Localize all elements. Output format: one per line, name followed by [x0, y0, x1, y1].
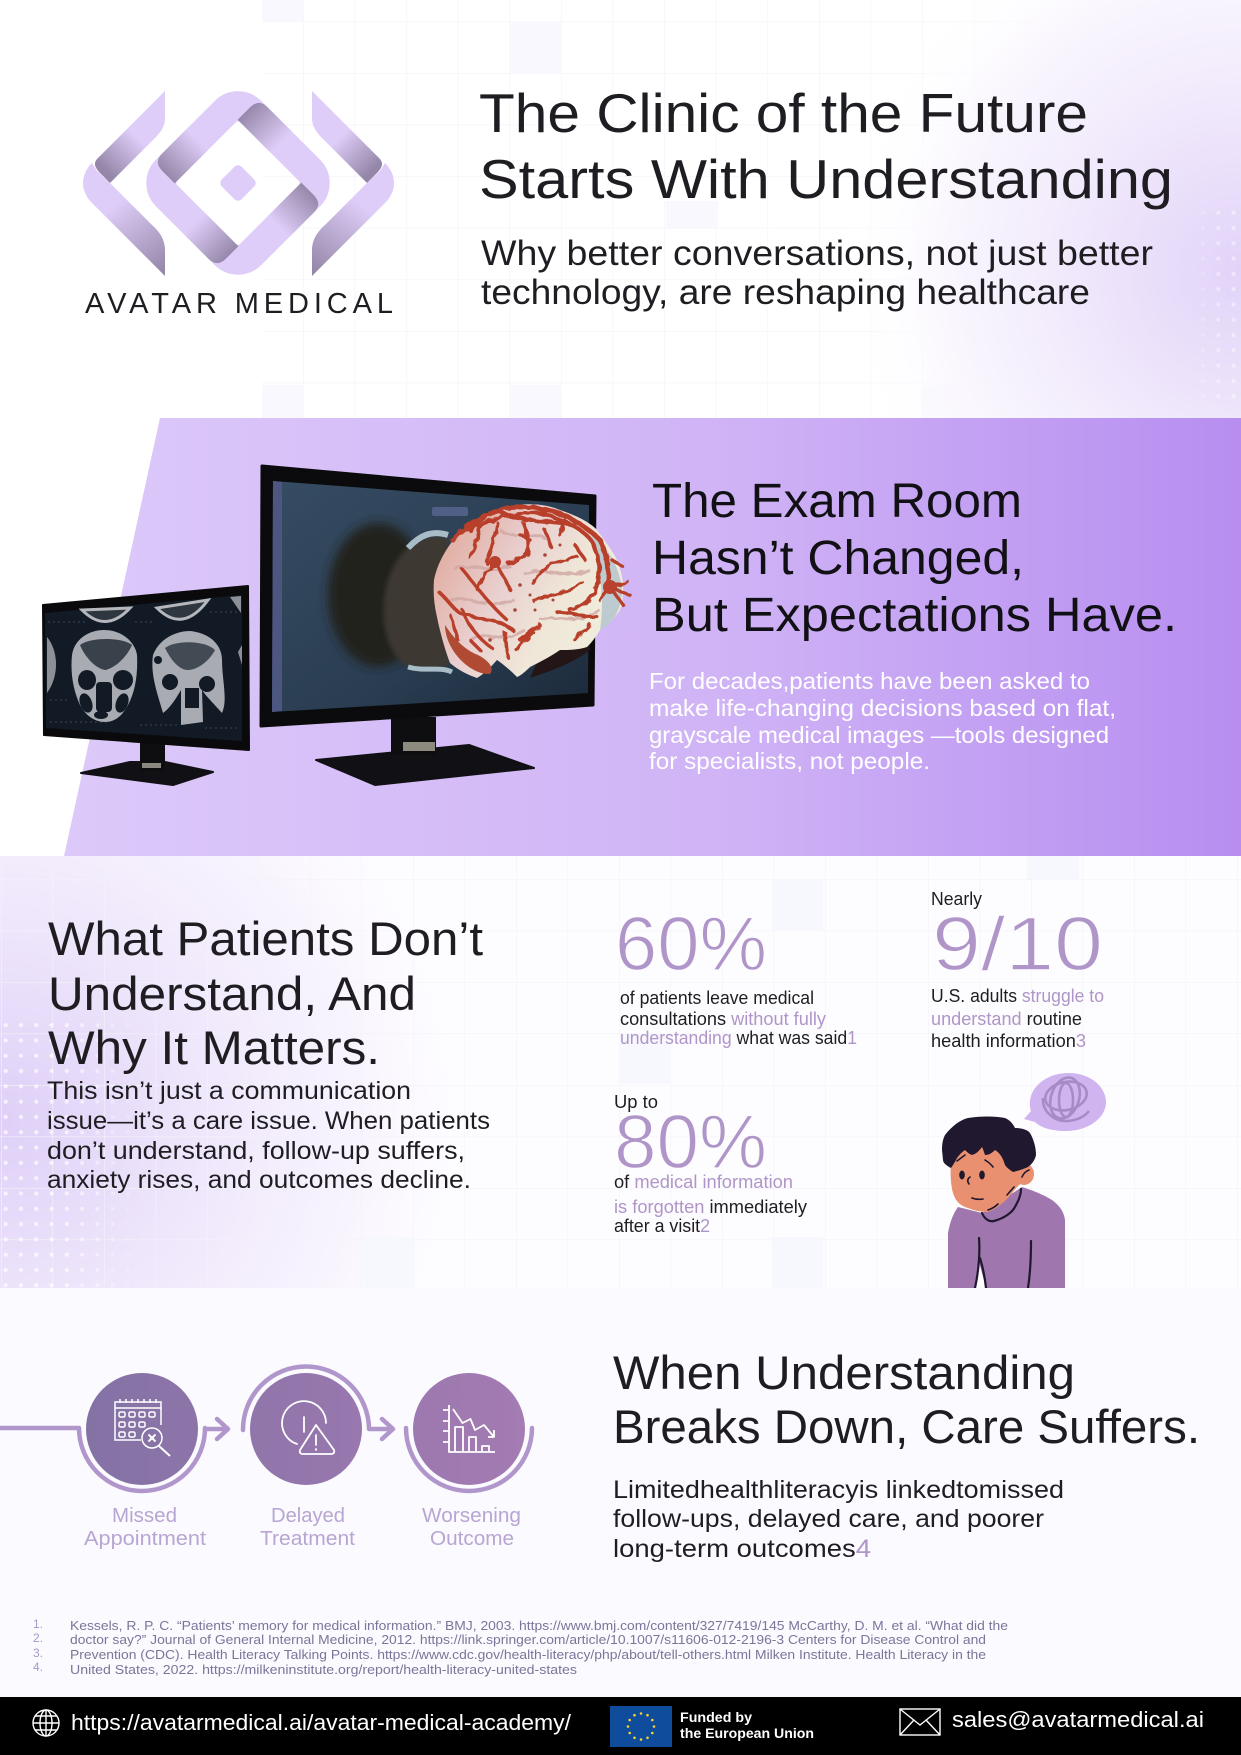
references: 1.: [33, 1617, 43, 1631]
hero heading: The Exam Room: [652, 475, 1022, 528]
section heading: Understand, And: [48, 967, 416, 1020]
logo mark: right chevron: [312, 91, 394, 276]
hero paragraph: [649, 668, 1116, 774]
stat: 80%: of medical information: [614, 1172, 793, 1192]
section heading: [613, 1346, 1200, 1453]
step labels: Worsening: [422, 1505, 521, 1527]
references: [33, 1617, 1008, 1677]
hero gradient band: [64, 418, 1241, 856]
title: The Clinic of the Future: [479, 82, 1088, 144]
mid brain layer: [384, 536, 449, 670]
email address: sales@avatarmedical.ai: [952, 1707, 1204, 1732]
panel: when understanding breaks down: [0, 1288, 1241, 1697]
connector arc 3: [406, 1428, 532, 1491]
step labels: Appointment: [84, 1528, 206, 1550]
face: [951, 1145, 1026, 1212]
stat: 60%: [615, 902, 857, 1048]
stat: 60%: understanding what was said1: [620, 1028, 857, 1048]
section heading: [48, 912, 483, 1074]
stat: 60%: 60%: [615, 902, 767, 987]
step 3 circle and falling chart icon: [413, 1373, 525, 1485]
section background: [0, 1288, 1241, 1697]
references: 2.: [33, 1631, 43, 1645]
logo: Avatar Medical: [83, 78, 394, 320]
stat: 60%: of patients leave medical: [620, 988, 814, 1008]
step labels: [84, 1505, 521, 1550]
panel: what patients don't understand: [0, 856, 1241, 1288]
subtitle: technology, are reshaping healthcare: [481, 273, 1090, 312]
icon: envelope: [900, 1709, 940, 1735]
3D brain with vessels: [434, 504, 630, 678]
stat: 9/10: understand routine: [931, 1009, 1082, 1029]
section paragraph: follow-ups, delayed care, and poorer: [613, 1505, 1044, 1533]
stat: 80%: 80%: [614, 1100, 767, 1185]
section heading: When Understanding: [613, 1346, 1075, 1399]
section paragraph: don’t understand, follow-up suffers,: [47, 1137, 465, 1165]
references: 3.: [33, 1646, 43, 1660]
references: doctor say?” Journal of General Internal Medicine, 2012. https://link.springer.com/article/10.1007/s11606-012-2196-3 Centers for Disease Control and: [70, 1633, 986, 1647]
section paragraph: [47, 1077, 490, 1194]
section background: [0, 856, 1241, 1288]
connector arc 2 with arrow: [243, 1366, 393, 1439]
section heading: Breaks Down, Care Suffers.: [613, 1400, 1200, 1453]
hero heading: Hasn’t Changed,: [652, 532, 1024, 585]
section paragraph: Limitedhealthliteracyis linkedtomissed: [613, 1476, 1064, 1504]
hero paragraph: make life-changing decisions based on flat,: [649, 695, 1116, 721]
stat: 80%: Up to: [614, 1092, 658, 1112]
funding statement: the European Union: [680, 1725, 814, 1741]
hair: [942, 1116, 1036, 1172]
stat: 80%: is forgotten immediately: [614, 1197, 807, 1217]
blurred dark brain layer: [328, 523, 428, 667]
illustration: confused patient with thought bubble: [942, 1073, 1106, 1288]
funding statement: Funded by: [680, 1709, 752, 1725]
step labels: Missed: [112, 1505, 177, 1527]
stat: 9/10: Nearly: [931, 889, 982, 909]
section paragraph: anxiety rises, and outcomes decline.: [47, 1166, 471, 1194]
step labels: Delayed: [271, 1505, 345, 1527]
stat: 60%: consultations without fully: [620, 1009, 826, 1029]
logo mark: left chevron: [83, 91, 165, 276]
references: 4.: [33, 1660, 43, 1674]
subtitle: Why better conversations, not just better: [481, 234, 1153, 273]
page background: header: [0, 0, 1241, 418]
facial features: [957, 1155, 1029, 1210]
large monitor with 3D brain: [261, 466, 630, 785]
process flow: missed appointment to worsening outcome: [0, 1366, 532, 1550]
subtitle: [481, 234, 1153, 312]
connector line 1 with arrow: [0, 1419, 228, 1491]
CT skull right: [152, 631, 225, 725]
stat: 9/10: health information3: [931, 1031, 1086, 1051]
logo mark: woven diamond ring: [133, 78, 343, 288]
hero paragraph: For decades,patients have been asked to: [649, 668, 1090, 694]
arm gap: [975, 1262, 986, 1288]
hero heading: [652, 475, 1177, 642]
ear: [1014, 1163, 1034, 1185]
step 2 circle and warning clock icon: [250, 1373, 362, 1485]
funding statement: [680, 1709, 814, 1741]
thought bubble: [1024, 1073, 1106, 1131]
references: United States, 2022. https://milkeninstitute.org/report/health-literacy-united-states: [70, 1663, 577, 1677]
panel: exam room hero: [43, 418, 1241, 856]
stat: 80%: after a visit2: [614, 1216, 710, 1236]
torso: [948, 1187, 1065, 1288]
section paragraph: issue—it’s a care issue. When patients: [47, 1107, 490, 1135]
CT top slices: [47, 596, 242, 693]
footer bar: [0, 1697, 1241, 1755]
EU flag: [610, 1706, 672, 1747]
step labels: Outcome: [430, 1528, 514, 1550]
title: Starts With Understanding: [479, 148, 1173, 210]
references: Prevention (CDC). Health Literacy Talking Points. https://www.cdc.gov/health-literacy/php/about/tell-others.html Milken Institute. Health Literacy in the: [70, 1648, 986, 1662]
small monitor with CT scans: [43, 586, 249, 785]
stat: 80%: [614, 1092, 807, 1236]
stat: 9/10: U.S. adults struggle to: [931, 986, 1104, 1006]
collar and arm lines: [975, 1189, 1031, 1288]
section heading: Why It Matters.: [48, 1021, 380, 1074]
stat: 9/10: 9/10: [932, 902, 1103, 987]
step labels: Treatment: [260, 1528, 355, 1550]
step 1 circle and calendar icon: [86, 1373, 198, 1485]
icon: globe: [33, 1710, 59, 1736]
section paragraph: long-term outcomes 4: [613, 1535, 871, 1563]
website link: https://avatarmedical.ai/avatar-medical-academy/: [71, 1710, 572, 1735]
section paragraph: [613, 1476, 1064, 1563]
hero paragraph: grayscale medical images —tools designed: [649, 722, 1109, 748]
hero heading: But Expectations Have.: [652, 589, 1177, 642]
stat: 9/10: [931, 889, 1104, 1051]
section heading: What Patients Don’t: [48, 912, 483, 965]
title: [479, 82, 1173, 210]
section paragraph: This isn’t just a communication: [47, 1077, 411, 1105]
references: Kessels, R. P. C. “Patients’ memory for medical information.” BMJ, 2003. https://www.bmj.com/content/327/7419/145 McCarthy, D. M. et al. “What did the: [70, 1619, 1008, 1633]
hero paragraph: for specialists, not people.: [649, 748, 930, 774]
CT skull left: [71, 630, 137, 722]
logo wordmark: AVATAR MEDICAL: [85, 288, 393, 320]
